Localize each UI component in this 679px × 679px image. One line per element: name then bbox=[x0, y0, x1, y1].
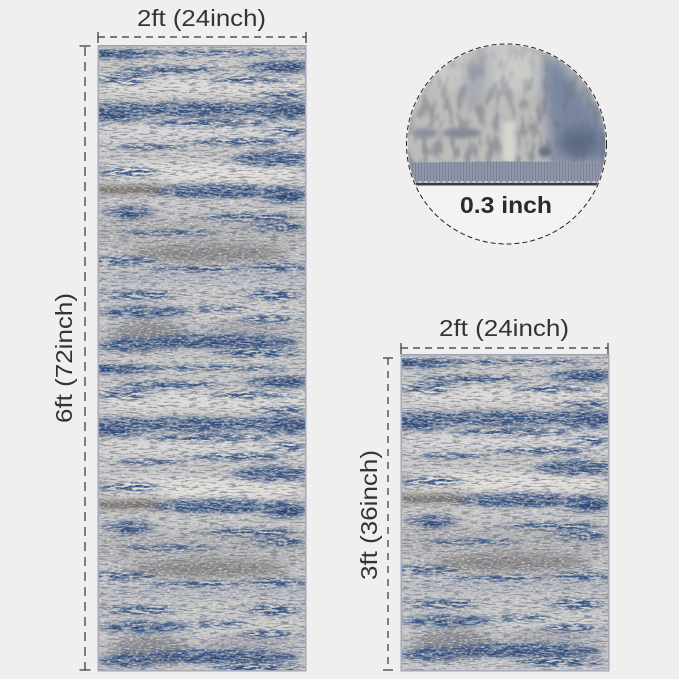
dimension line: runner width bbox=[98, 32, 306, 43]
label: runner width: 2ft (24inch) bbox=[137, 5, 266, 31]
label: runner length: 6ft (72inch) bbox=[51, 293, 77, 423]
dashed circle outline bbox=[406, 44, 606, 244]
rug close-up photo bbox=[408, 45, 606, 186]
dimension line: small rug width bbox=[401, 343, 608, 354]
panel: tall runner rug bbox=[98, 45, 306, 672]
panel: small rug bbox=[400, 354, 610, 672]
dimension line: runner length bbox=[80, 46, 90, 670]
label: thickness: 0.3 inch bbox=[460, 192, 552, 218]
rug binding edge bbox=[400, 162, 612, 185]
dimension line: small rug length bbox=[383, 358, 393, 670]
label: small rug width: 2ft (24inch) bbox=[439, 315, 569, 341]
label: small rug length: 3ft (36inch) bbox=[356, 450, 382, 580]
panel: thickness detail circle bbox=[400, 40, 615, 246]
